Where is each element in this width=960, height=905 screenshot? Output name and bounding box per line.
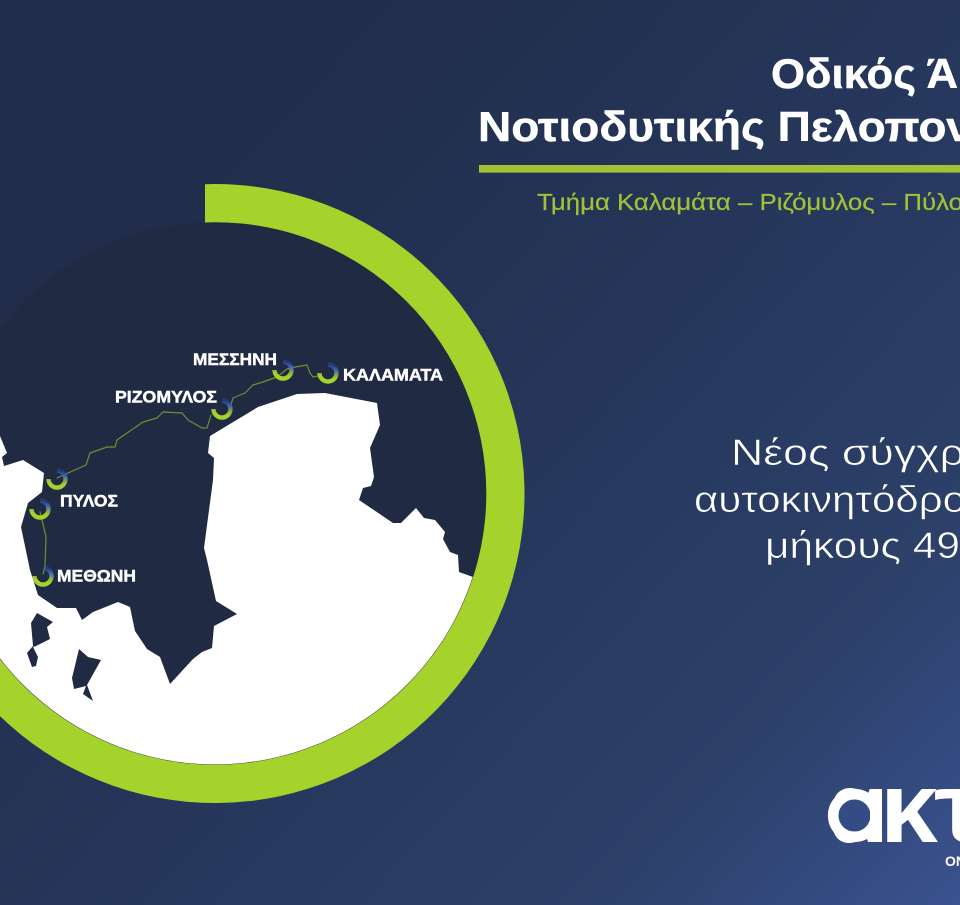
marker: Πύλος north — [48, 470, 66, 488]
title line 1: Οδικός Ά — [771, 50, 958, 97]
label: Καλαμάτα: ΚΑΛΑΜΑΤΑ — [343, 365, 443, 384]
description line 1: Νέος σύγχρ — [731, 432, 960, 473]
logo letter kappa: κ — [880, 752, 938, 864]
marker: Καλαμάτα — [320, 364, 336, 382]
label: Ριζόμυλος: ΡΙΖΟΜΥΛΟΣ — [115, 387, 217, 406]
description line 3: μήκους 49 — [765, 525, 960, 566]
green title rule — [479, 165, 960, 173]
marker: Πύλος south — [32, 500, 48, 518]
road route — [40, 365, 318, 574]
marker: Μεσσήνη — [274, 362, 292, 378]
green progress ring — [0, 184, 524, 803]
marker: Μεθώνη — [34, 568, 52, 584]
logo letter alpha: α — [828, 752, 882, 864]
navy land disc — [0, 222, 486, 765]
description line 2: αυτοκινητόδρο — [694, 479, 960, 520]
logo — [828, 752, 960, 869]
label: Μεσσήνη: ΜΕΣΣΗΝΗ — [193, 350, 277, 369]
marker: Ριζόμυλος — [214, 400, 230, 418]
label: Πύλος: ΠΥΛΟΣ — [60, 491, 118, 510]
map — [0, 184, 524, 803]
white sea — [0, 393, 473, 764]
title line 2: Νοτιοδυτικής Πελοπον — [478, 103, 960, 150]
label: Μεθώνη: ΜΕΘΩΝΗ — [57, 566, 136, 585]
islands — [27, 613, 53, 667]
subtitle: Τμήμα Καλαμάτα – Ριζόμυλος – Πύλο — [537, 189, 960, 215]
